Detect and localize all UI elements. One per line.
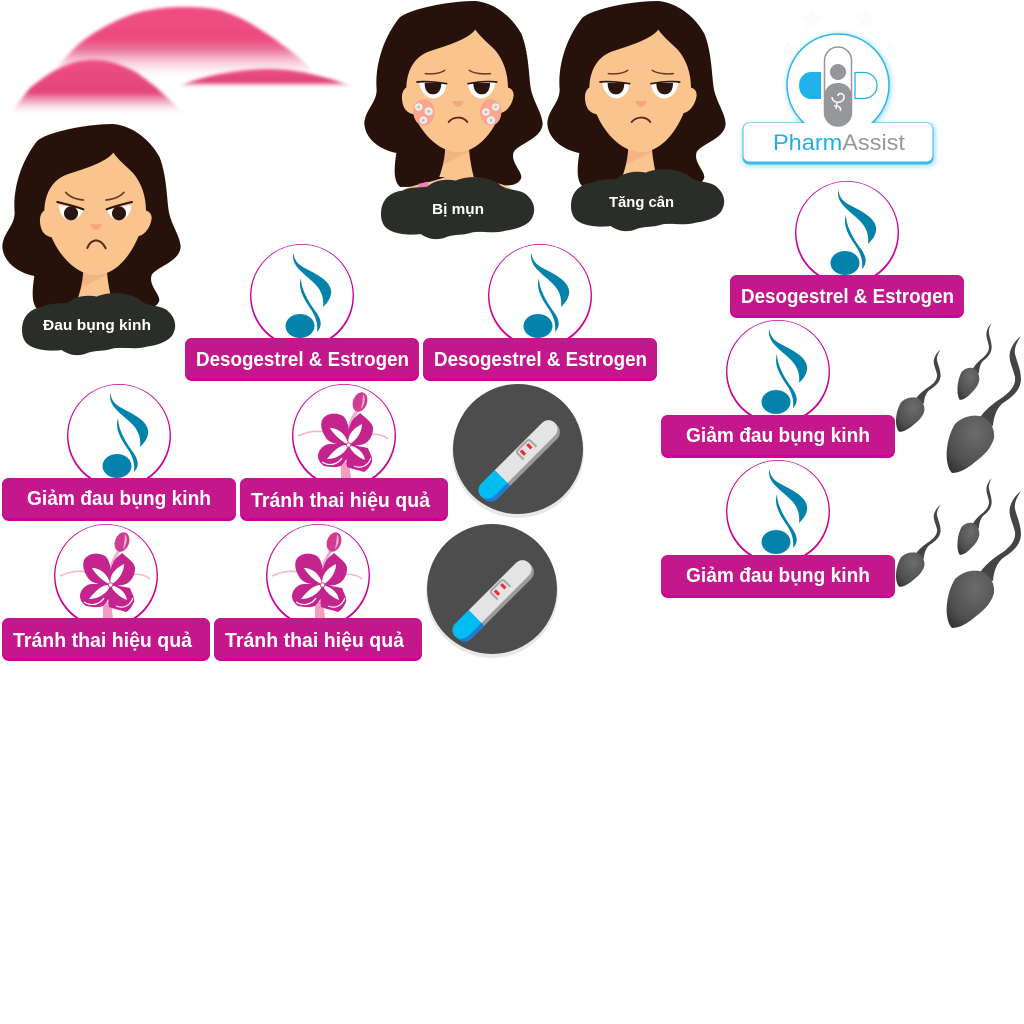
label: Tăng cân: Tăng cân <box>609 194 674 211</box>
label <box>661 555 895 598</box>
icon: sperm group bottom <box>896 478 1021 628</box>
label: Giảm đau bụng kinh <box>27 488 211 510</box>
icon: flower <box>54 524 158 628</box>
label: Tránh thai hiệu quả <box>251 490 431 512</box>
icon: pregnancy test 1 <box>452 384 584 518</box>
logo: PharmAssist <box>742 10 935 166</box>
logo capsules <box>799 47 877 126</box>
icon: flower <box>266 524 370 628</box>
label: Bị mụn: Bị mụn <box>432 201 484 218</box>
label: Giảm đau bụng kinh <box>686 425 870 447</box>
label <box>240 478 448 521</box>
decorative pink mounds <box>10 7 354 114</box>
label <box>214 618 422 661</box>
card: Tránh thai hiệu quả, top <box>240 384 448 521</box>
card: Giảm đau bụng kinh, left <box>2 384 236 521</box>
label: Desogestrel & Estrogen <box>196 349 409 371</box>
label <box>730 275 964 318</box>
icon: music note <box>726 460 830 564</box>
card: Giảm đau bụng kinh, right bottom <box>661 460 895 598</box>
icon: sperm group top <box>896 323 1021 473</box>
logo glow <box>743 34 935 166</box>
label: Desogestrel & Estrogen <box>434 349 647 371</box>
card: Desogestrel & Estrogen 2 <box>423 244 657 381</box>
label: Tránh thai hiệu quả <box>225 630 405 652</box>
label: Đau bụng kinh: Đau bụng kinh <box>43 317 151 334</box>
speech cloud <box>22 293 175 355</box>
card: Desogestrel & Estrogen 1 <box>185 244 419 381</box>
character: angry woman, menstrual pain <box>2 124 181 355</box>
icon: flower <box>292 384 396 488</box>
label: Tránh thai hiệu quả <box>13 630 193 652</box>
icon: pregnancy test 2 <box>426 524 558 658</box>
character: woman with acne <box>364 1 543 239</box>
label <box>2 618 210 661</box>
face: angry <box>2 124 181 310</box>
speech cloud <box>381 177 534 239</box>
logo badge <box>787 34 889 136</box>
card: Desogestrel & Estrogen 3 <box>730 181 964 318</box>
icon: music note <box>795 181 899 285</box>
label: Desogestrel & Estrogen <box>741 286 954 308</box>
card: Tránh thai hiệu quả, bottom right <box>214 524 422 661</box>
label <box>185 338 419 381</box>
icon: music note <box>488 244 592 348</box>
face: sad <box>547 1 726 187</box>
label: Giảm đau bụng kinh <box>686 565 870 587</box>
speech cloud <box>571 169 724 231</box>
character: woman with weight gain <box>547 1 726 231</box>
icon: music note <box>67 384 171 488</box>
logo stars <box>782 10 896 54</box>
label <box>423 338 657 381</box>
face: acne <box>364 1 543 189</box>
icon: music note <box>726 320 830 424</box>
card: Giảm đau bụng kinh, right top <box>661 320 895 458</box>
icon: music note <box>250 244 354 348</box>
label <box>661 415 895 458</box>
label <box>2 478 236 521</box>
card: Tránh thai hiệu quả, bottom left <box>2 524 210 661</box>
logo wordmark: PharmAssist <box>773 130 905 155</box>
